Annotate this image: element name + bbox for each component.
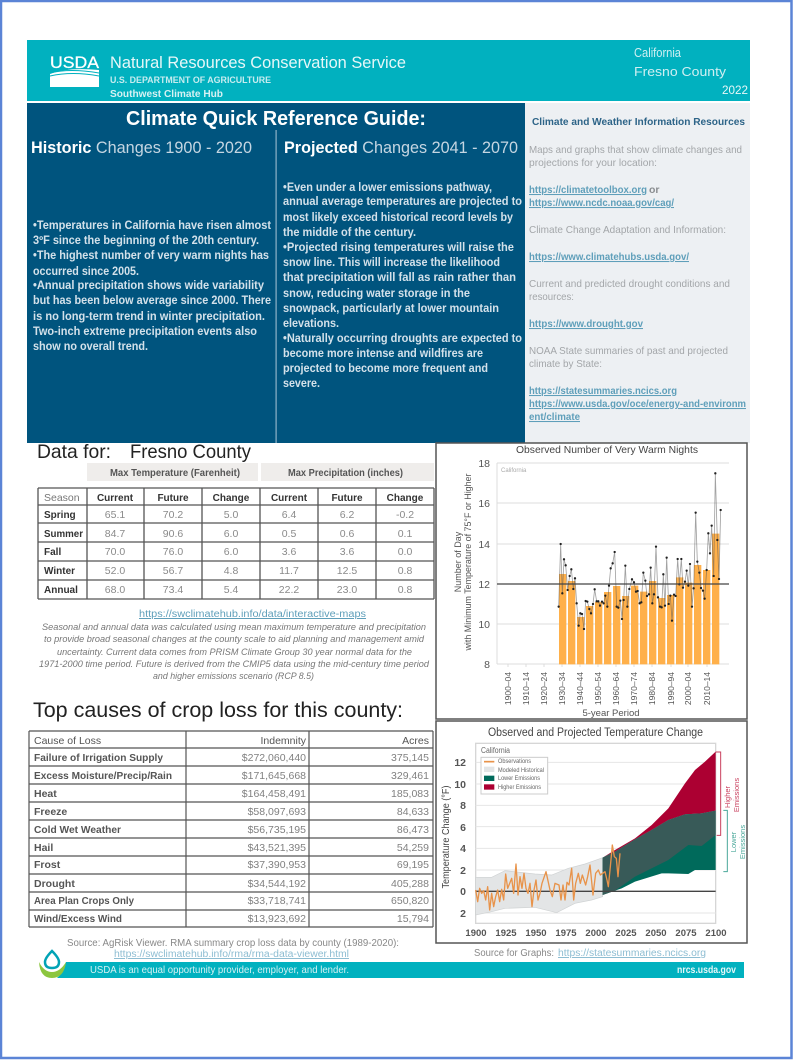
resources list: NOAA State summaries of past and projected — [529, 345, 728, 357]
row: annual: Annual — [44, 585, 78, 596]
row: fall: 3.6 — [340, 546, 354, 558]
text block: projected changes: snow, reducing water storage in the — [283, 288, 470, 300]
x axis labels: 1900–04 — [503, 672, 513, 705]
resources list: https://www.usda.gov/oce/energy-and-environm — [529, 398, 746, 410]
table header row — [44, 492, 424, 504]
row: heat — [34, 788, 429, 800]
y axis labels: 8 — [484, 659, 490, 671]
legend labels — [481, 746, 544, 791]
x axis labels: 1910–14 — [521, 672, 531, 705]
row: summer — [44, 528, 412, 540]
row: hail: 54,259 — [397, 842, 429, 854]
y axis title: with Minimum Temperature of 75°F or Higher — [463, 473, 473, 651]
source: crop loss data — [67, 938, 399, 960]
resources list: https://www.drought.gov — [529, 318, 643, 330]
row: excess moisture: $171,645,668 — [242, 770, 306, 782]
footer website: nrcs.usda.gov — [677, 965, 736, 976]
y axis labels: 0 — [460, 886, 466, 898]
row: annual: 5.4 — [224, 584, 238, 596]
row: cold wet weather: 86,473 — [397, 824, 429, 836]
y axis labels: 12 — [478, 579, 490, 591]
table header row: Current — [271, 493, 308, 504]
row: frost: 69,195 — [397, 859, 429, 871]
resources list: https://www.ncdc.noaa.gov/cag/ — [529, 197, 674, 209]
resources list: resources: — [529, 291, 574, 303]
x axis labels: 2075 — [675, 928, 697, 939]
icon: water drop — [39, 951, 66, 978]
row: freeze: Freeze — [34, 806, 67, 818]
y axis labels — [478, 458, 490, 671]
x axis labels: 2050 — [645, 928, 667, 939]
x axis labels: 1920–24 — [539, 672, 549, 705]
resources heading: Climate and Weather Information Resources — [532, 116, 745, 128]
row: area plan crops only: $33,718,741 — [248, 895, 306, 907]
legend labels: Lower Emissions — [498, 775, 541, 782]
text block: projected changes: annual average temperatures are projected to — [283, 196, 522, 208]
x axis labels: 1930–34 — [557, 672, 567, 705]
row: summer: 6.0 — [224, 528, 238, 540]
table header row: Season — [44, 492, 80, 504]
text block: projected changes: that precipitation will fall as rain rather than — [283, 272, 516, 284]
row: winter — [44, 565, 412, 577]
row: area plan crops only: Area Plan Crops Only — [34, 895, 134, 907]
resources list: https://statesummaries.ncics.org — [529, 385, 677, 397]
header department: U.S. DEPARTMENT OF AGRICULTURE — [110, 75, 271, 86]
y axis labels: 12 — [454, 757, 466, 769]
row: cold wet weather — [34, 824, 429, 836]
row: winter: 0.8 — [398, 565, 412, 577]
header year: 2022 — [722, 85, 748, 97]
row: hail: $43,521,395 — [248, 842, 306, 854]
y axis labels: 10 — [454, 779, 466, 791]
panel: climate summary — [27, 103, 525, 443]
y axis labels: 8 — [460, 800, 466, 812]
heading: data for Fresno County: Fresno County — [130, 441, 251, 463]
panel: information resources — [525, 103, 750, 443]
source: crop loss data: https://swclimatehub.info/rma/rma-data-viewer.html — [114, 949, 349, 960]
row: annual: 22.2 — [279, 584, 299, 596]
resources list: https://climatetoolbox.org — [529, 184, 647, 196]
text block: projected changes: •Even under a lower emissions pathway, — [283, 182, 492, 194]
text block: historic changes: occurred since 2005. — [33, 266, 139, 278]
table group headers: Max Temperature (Farenheit) — [110, 468, 240, 479]
row: fall: 76.0 — [163, 546, 183, 558]
row: fall: Fall — [44, 547, 61, 558]
resources list: https://www.climatehubs.usda.gov/ — [529, 251, 689, 263]
chart title: Observed Number of Very Warm Nights — [516, 444, 698, 456]
legend labels: Higher Emissions — [498, 784, 542, 791]
x axis labels: 2000–04 — [683, 672, 693, 705]
header state: California — [634, 45, 682, 60]
higher emissions label: Emissions — [732, 778, 741, 812]
row: heat: $164,458,491 — [242, 788, 306, 800]
x axis labels: 1950 — [525, 928, 547, 939]
x axis labels: 2100 — [705, 928, 727, 939]
source: graphs: Source for Graphs: — [474, 948, 554, 959]
row: winter: 11.7 — [279, 565, 299, 577]
row: spring: 6.2 — [340, 509, 354, 521]
text block: historic changes: is no long-term trend in winter precipitation. — [33, 311, 265, 323]
heading: top causes of crop loss: Top causes of crop loss for this county: — [33, 699, 403, 722]
resources list: or — [649, 184, 660, 196]
x axis labels: 2010–14 — [702, 672, 712, 705]
row: annual: 0.8 — [398, 584, 412, 596]
text block: projected changes: severe. — [283, 378, 320, 390]
text block: historic changes — [33, 220, 271, 353]
y axis labels: 2 — [460, 908, 466, 920]
row: cold wet weather: Cold Wet Weather — [34, 824, 121, 836]
row: freeze: 84,633 — [397, 806, 429, 818]
row: summer: 90.6 — [163, 528, 183, 540]
main title: Climate Quick Reference Guide: — [126, 108, 426, 130]
higher emissions label — [723, 778, 741, 812]
table group headers: Max Precipitation (inches) — [288, 468, 403, 479]
row: drought — [34, 878, 429, 890]
row: fall: 70.0 — [105, 546, 125, 558]
row: spring: 5.0 — [224, 509, 238, 521]
text block: projected changes: projected to become more frequent and — [283, 363, 488, 375]
text block: projected changes: •Projected rising temperatures will raise the — [283, 242, 514, 254]
state label: California — [501, 468, 527, 474]
text block: historic changes: •Annual precipitation shows wide variability — [33, 280, 265, 292]
y axis title — [453, 473, 473, 651]
table header row: Change — [387, 493, 424, 504]
data link: https://swclimatehub.info/data/interactive-maps — [139, 609, 366, 620]
text block: projected changes — [283, 182, 522, 390]
text block: data methodology note: 1971-2000 time period. Future is derived from the CMIP5 data using the mid-century time period — [39, 659, 430, 670]
row: failure of irrigation supply: 375,145 — [391, 752, 429, 764]
text block: historic changes: Two-inch extreme precipitation events also — [33, 326, 257, 338]
y axis labels: 18 — [478, 458, 490, 470]
x axis labels — [465, 928, 727, 939]
row: frost: $37,390,953 — [248, 859, 306, 871]
row: summer: 0.6 — [340, 528, 354, 540]
row: hail: Hail — [34, 842, 53, 854]
row: freeze — [34, 806, 429, 818]
row: heat: Heat — [34, 788, 57, 800]
x axis labels: 1950–54 — [593, 672, 603, 705]
row: hail — [34, 842, 429, 854]
x axis labels: 1900 — [465, 928, 487, 939]
x axis labels: 1960–64 — [611, 672, 621, 705]
x axis labels: 1990–94 — [666, 672, 676, 705]
table header row: Future — [331, 493, 363, 504]
table header row: Future — [157, 493, 189, 504]
crop loss header row: Acres — [402, 735, 429, 747]
text block: projected changes: snowpack, particularly at lower mountain — [283, 303, 499, 315]
heading: data for Fresno County — [37, 441, 251, 463]
x axis labels: 1975 — [555, 928, 577, 939]
y axis labels: 10 — [478, 619, 490, 631]
row: spring: 6.4 — [282, 509, 296, 521]
row: area plan crops only: 650,820 — [391, 895, 429, 907]
icon: USDA logo — [50, 53, 100, 87]
row: winter: 52.0 — [105, 565, 125, 577]
footer banner — [57, 962, 744, 978]
table header row: Change — [213, 493, 250, 504]
row: failure of irrigation supply: Failure of Irrigation Supply — [34, 752, 163, 764]
lower emissions label: Lower — [729, 831, 738, 852]
lower emissions label — [729, 825, 747, 859]
row: annual — [44, 584, 412, 596]
table group headers — [87, 463, 434, 481]
chart: observed number of very warm nights — [436, 443, 747, 719]
text block: projected changes: become more intense and wildfires are — [283, 348, 483, 360]
text block: projected changes: elevations. — [283, 318, 339, 330]
x axis title: 5-year Period — [582, 708, 640, 719]
higher emissions label: Higher — [723, 785, 732, 808]
row: fall: 0.0 — [398, 546, 412, 558]
header banner — [27, 40, 750, 101]
text block: projected changes: •Naturally occurring droughts are expected to — [283, 333, 522, 345]
chart title: Observed and Projected Temperature Change — [488, 727, 703, 739]
bars and observed points — [559, 473, 721, 664]
resources list: climate by State: — [529, 358, 602, 370]
legend labels: Observations — [498, 758, 532, 765]
heading: historic changes: Historic Changes 1900 - 2020 — [31, 138, 252, 157]
row: frost — [34, 859, 429, 871]
text block: projected changes: the middle of the century. — [283, 227, 416, 239]
icon: USDA logo: USDA — [50, 53, 100, 72]
header hub name: Southwest Climate Hub — [110, 89, 223, 100]
source: graphs — [474, 948, 706, 959]
row: winter: 12.5 — [337, 565, 357, 577]
footer statement: USDA is an equal opportunity provider, employer, and lender. — [90, 965, 349, 976]
lower emissions label: Emissions — [738, 825, 747, 859]
y axis labels: 2 — [460, 865, 466, 877]
row: frost: Frost — [34, 859, 61, 871]
row: drought: Drought — [34, 878, 75, 890]
x axis labels: 2025 — [615, 928, 637, 939]
text block: data methodology note: uncertainty. Current data comes from PRISM Climate Group 30 year normal data for the — [57, 647, 412, 658]
row: fall — [44, 546, 412, 558]
row: spring: Spring — [44, 510, 76, 521]
row: freeze: $58,097,693 — [248, 806, 306, 818]
header county: Fresno County — [634, 64, 727, 79]
row: winter: 4.8 — [224, 565, 238, 577]
x axis labels: 2000 — [585, 928, 607, 939]
row: wind: $13,923,692 — [248, 913, 306, 925]
row: area plan crops only — [34, 895, 429, 907]
x axis labels: 1980–84 — [647, 672, 657, 705]
resources list — [529, 144, 746, 423]
row: failure of irrigation supply — [34, 752, 429, 764]
y axis labels: 16 — [478, 498, 490, 510]
y axis labels: 6 — [460, 822, 466, 834]
row: drought: 405,288 — [391, 878, 429, 890]
y axis title: Temperature Change (°F) — [441, 786, 452, 888]
text block: projected changes: snow line. This will increase the likelihood — [283, 257, 500, 269]
x axis labels: 1940–44 — [575, 672, 585, 705]
row: fall: 3.6 — [282, 546, 296, 558]
chart legend swatches — [481, 757, 548, 794]
row: spring: 65.1 — [105, 509, 125, 521]
text block: historic changes: but has been below average since 2000. There — [33, 295, 271, 307]
row: winter: Winter — [44, 566, 75, 577]
resources list: ent/climate — [529, 411, 580, 423]
header agency name: Natural Resources Conservation Service — [110, 53, 406, 72]
row: spring: -0.2 — [396, 509, 414, 521]
legend labels: Modeled Historical — [498, 767, 544, 774]
text block: data methodology note: to provide broad seasonal changes at the county scale to aid planning and management amid — [44, 634, 425, 645]
row: spring: 70.2 — [163, 509, 183, 521]
table: crop loss causes — [29, 731, 433, 927]
y axis labels: 4 — [460, 843, 466, 855]
x axis labels — [503, 672, 712, 705]
row: wind — [34, 913, 429, 925]
row: annual: 68.0 — [105, 584, 125, 596]
row: wind: 15,794 — [397, 913, 429, 925]
text block: data methodology note: Seasonal and annual data was calculated using mean maximum temperature and precipitation — [42, 622, 426, 633]
emissions brackets — [716, 752, 721, 835]
row: excess moisture: Excess Moisture/Precip/Rain — [34, 770, 172, 782]
row: spring — [44, 509, 414, 521]
crop loss header row — [34, 735, 429, 747]
heading: data for Fresno County: Data for: — [37, 441, 111, 463]
resources list: Current and predicted drought conditions and — [529, 278, 730, 290]
row: wind: Wind/Excess Wind — [34, 913, 122, 925]
table header row: Current — [97, 493, 134, 504]
row: winter: 56.7 — [163, 565, 183, 577]
text block: data methodology note — [39, 622, 430, 682]
resources list: Maps and graphs that show climate changes and — [529, 144, 742, 156]
x axis labels: 1925 — [495, 928, 517, 939]
row: annual: 73.4 — [163, 584, 183, 596]
text block: historic changes: •Temperatures in California have risen almost — [33, 220, 271, 232]
row: excess moisture — [34, 770, 429, 782]
table: seasonal temperature and precipitation — [38, 463, 434, 599]
row: summer: 0.5 — [282, 528, 296, 540]
chart: observed and projected temperature change — [436, 721, 747, 943]
plotted emissions ranges — [476, 743, 727, 923]
source: crop loss data: Source: AgRisk Viewer. RMA summary crop loss data by county (1989-2020): — [67, 938, 399, 949]
row: summer: 0.1 — [398, 528, 412, 540]
row: excess moisture: 329,461 — [391, 770, 429, 782]
y axis labels — [454, 757, 466, 920]
text block: historic changes: •The highest number of very warm nights has — [33, 250, 269, 262]
resources list: Climate Change Adaptation and Information: — [529, 224, 726, 236]
y axis labels: 14 — [478, 539, 490, 551]
source: graphs: https://statesummaries.ncics.org — [558, 948, 706, 959]
crop loss header row: Cause of Loss — [34, 735, 101, 747]
row: failure of irrigation supply: $272,060,440 — [242, 752, 306, 764]
legend labels: California — [481, 746, 510, 755]
crop loss header row: Indemnity — [260, 735, 307, 747]
row: fall: 6.0 — [224, 546, 238, 558]
resources list: projections for your location: — [529, 157, 657, 169]
row: annual: 23.0 — [337, 584, 357, 596]
row: cold wet weather: $56,735,195 — [248, 824, 306, 836]
text block: projected changes: most likely exceed historical record levels by — [283, 212, 514, 224]
row: heat: 185,083 — [391, 788, 429, 800]
y axis title: Number of Day — [453, 531, 463, 592]
text block: historic changes: show no overall trend. — [33, 341, 148, 353]
text block: data methodology note: and higher emissions scenario (RCP 8.5) — [153, 671, 314, 682]
x axis labels: 1970–74 — [629, 672, 639, 705]
row: summer: 84.7 — [105, 528, 125, 540]
text block: historic changes: 3ºF since the beginning of the 20th century. — [33, 235, 259, 247]
heading: projected changes: Projected Changes 2041 - 2070 — [284, 138, 518, 157]
row: summer: Summer — [44, 529, 83, 540]
row: drought: $34,544,192 — [248, 878, 306, 890]
